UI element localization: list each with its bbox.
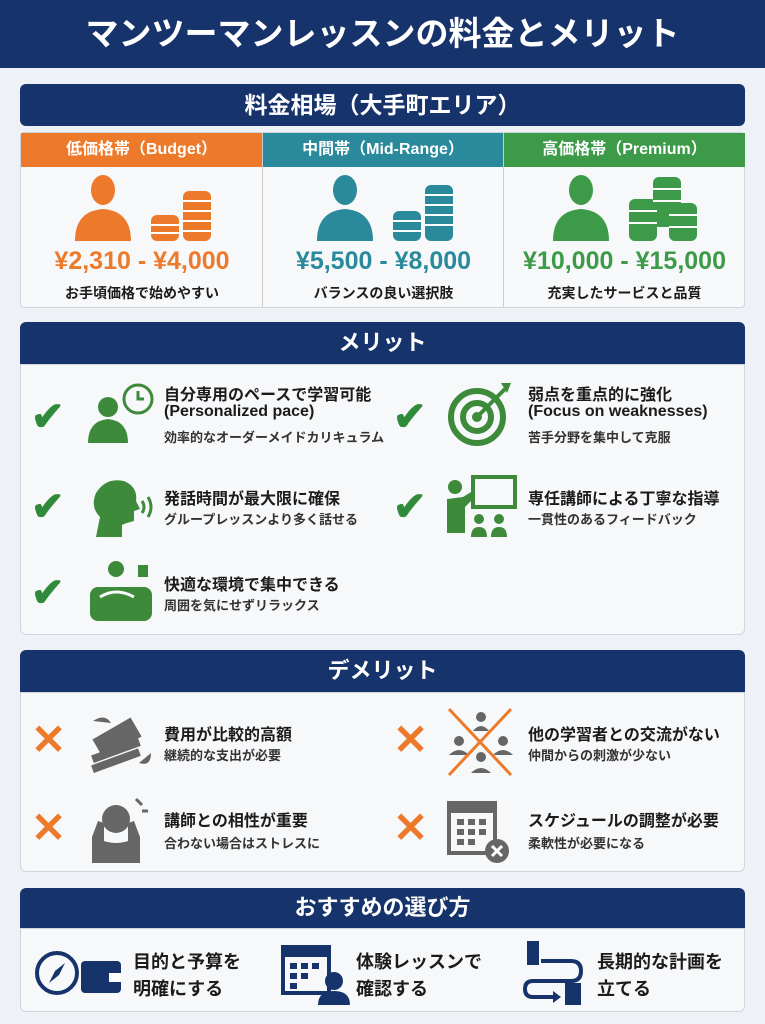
demerit 1: 費用が比較的高額 — [164, 727, 292, 744]
merit 2 — [393, 383, 708, 446]
tip 2 — [281, 945, 482, 1005]
column: premium — [504, 133, 745, 301]
column: mid-range: バランスの良い選択肢 — [314, 285, 453, 301]
tip 1: 目的と予算を — [133, 952, 241, 972]
merit 2: (Focus on weaknesses) — [528, 403, 708, 420]
merit 1: (Personalized pace) — [164, 403, 314, 420]
panel: how to choose — [20, 928, 745, 1012]
tip 2: 確認する — [356, 979, 428, 999]
heading: how to choose: おすすめの選び方 — [294, 895, 470, 920]
demerit 2 — [393, 708, 720, 776]
column: budget — [21, 133, 263, 307]
tip 3: 立てる — [597, 979, 651, 999]
demerit 1: 継続的な支出が必要 — [164, 748, 281, 763]
tip 1: 明確にする — [133, 979, 223, 999]
heading: pricing: 料金相場（大手町エリア） — [244, 92, 520, 118]
column: premium: ¥10,000 - ¥15,000 — [523, 247, 726, 275]
demerit 4: 柔軟性が必要になる — [528, 836, 645, 851]
tip 1 — [35, 951, 241, 999]
heading: demerits: デメリット — [327, 658, 438, 683]
heading: demerits — [20, 650, 745, 692]
tip 3 — [523, 941, 723, 1005]
tip 2: 体験レッスンで — [356, 952, 482, 972]
demerit 3: ✕ — [31, 804, 66, 851]
heading: merits: メリット — [338, 330, 426, 355]
panel: pricing — [20, 132, 745, 308]
merit 1: 自分専用のペースで学習可能 — [164, 387, 371, 404]
merit 3: 発話時間が最大限に確保 — [164, 491, 340, 508]
demerit 1 — [31, 716, 292, 773]
merit 1: ✔ — [31, 395, 65, 439]
demerit 2: 仲間からの刺激が少ない — [528, 748, 671, 763]
demerit 2: ✕ — [393, 716, 428, 763]
merit 4 — [393, 475, 720, 537]
demerit 3: 合わない場合はストレスに — [164, 836, 320, 851]
column: budget: ¥2,310 - ¥4,000 — [54, 247, 230, 275]
merit 1: 効率的なオーダーメイドカリキュラム — [164, 430, 384, 445]
demerit 1: ✕ — [31, 716, 66, 763]
demerit 3 — [31, 798, 320, 863]
merit 3: ✔ — [31, 485, 65, 529]
demerit 4 — [393, 801, 719, 863]
heading: pricing — [20, 84, 745, 126]
merit 3: グループレッスンより多く話せる — [164, 512, 358, 527]
demerit 2: 他の学習者との交流がない — [528, 727, 720, 744]
merit 5: 快適な環境で集中できる — [164, 577, 340, 594]
heading: merits — [20, 322, 745, 364]
merit 5: ✔ — [31, 571, 65, 615]
merit 4: 一貫性のあるフィードバック — [528, 512, 697, 527]
column: mid-range: ¥5,500 - ¥8,000 — [296, 247, 471, 275]
heading: how to choose — [20, 888, 745, 928]
title bar — [0, 0, 765, 68]
merit 4: ✔ — [393, 485, 427, 529]
column: budget: 低価格帯（Budget） — [66, 141, 217, 158]
merit 3 — [31, 480, 358, 537]
demerit 4: スケジュールの調整が必要 — [528, 813, 719, 830]
column: premium: 高価格帯（Premium） — [542, 141, 707, 158]
title bar: マンツーマンレッスンの料金とメリット — [86, 15, 680, 52]
merit 5 — [31, 561, 340, 621]
merit 2: 苦手分野を集中して克服 — [528, 430, 671, 445]
column: mid-range — [263, 133, 504, 307]
merit 4: 専任講師による丁寧な指導 — [528, 491, 720, 508]
panel: merits — [20, 364, 745, 635]
demerit 4: ✕ — [393, 804, 428, 851]
panel: demerits — [20, 692, 745, 872]
demerit 3: 講師との相性が重要 — [164, 813, 308, 830]
merit 1 — [31, 384, 384, 445]
column: budget: お手頃価格で始めやすい — [65, 285, 219, 301]
column: mid-range: 中間帯（Mid-Range） — [302, 141, 464, 158]
tip 3: 長期的な計画を — [597, 952, 723, 972]
merit 5: 周囲を気にせずリラックス — [164, 598, 320, 613]
column: premium: 充実したサービスと品質 — [548, 285, 702, 301]
merit 2: 弱点を重点的に強化 — [528, 387, 672, 404]
merit 2: ✔ — [393, 395, 427, 439]
